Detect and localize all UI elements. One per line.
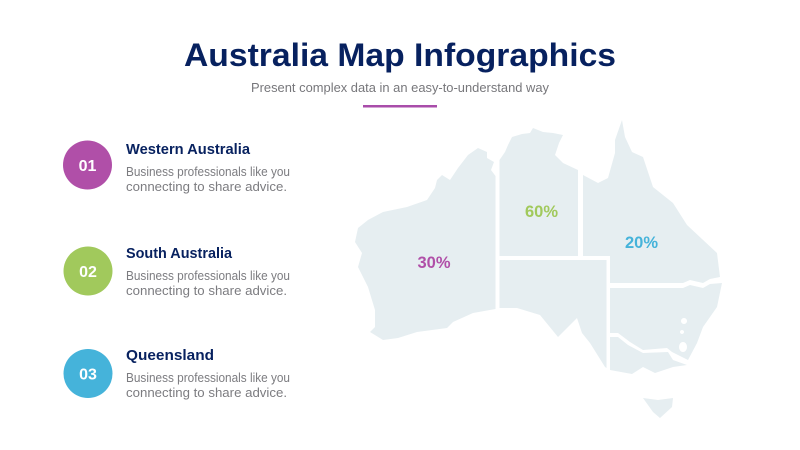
badge 02: 02 xyxy=(79,264,97,281)
region: Queensland xyxy=(583,120,720,283)
heading: Queensland xyxy=(126,347,214,364)
description: Business professionals like you xyxy=(126,165,290,179)
label: 60%: 60% xyxy=(525,203,558,221)
description: Business professionals like you xyxy=(126,269,290,283)
badge 01: 01 xyxy=(79,158,96,175)
region: Northern Territory xyxy=(500,128,578,256)
region: Victoria xyxy=(610,337,687,374)
badge 03 xyxy=(64,349,112,398)
region: Tasmania xyxy=(643,398,673,418)
region: South Australia xyxy=(500,260,606,368)
label: 30%: 30% xyxy=(417,254,451,272)
badge 02 xyxy=(64,246,112,296)
heading: Western Australia xyxy=(126,141,251,158)
region: New South Wales xyxy=(610,283,722,360)
region: Western Australia xyxy=(355,148,496,340)
list item 2: South Australia xyxy=(64,245,290,298)
description: Business professionals like you xyxy=(126,371,290,385)
list item 1: Western Australia xyxy=(63,140,290,194)
description: connecting to share advice. xyxy=(126,284,287,298)
description: connecting to share advice. xyxy=(126,386,287,400)
map of Australia xyxy=(355,120,722,418)
list item 3: Queensland xyxy=(64,347,290,400)
heading: South Australia xyxy=(126,245,233,262)
badge 01 xyxy=(63,140,112,190)
badge 03: 03 xyxy=(79,366,97,384)
subtitle: Present complex data in an easy-to-understand way xyxy=(251,81,550,95)
description: connecting to share advice. xyxy=(126,180,287,194)
title: Australia Map Infographics xyxy=(184,37,616,73)
accent underline xyxy=(363,105,437,108)
label: 20%: 20% xyxy=(625,234,658,252)
